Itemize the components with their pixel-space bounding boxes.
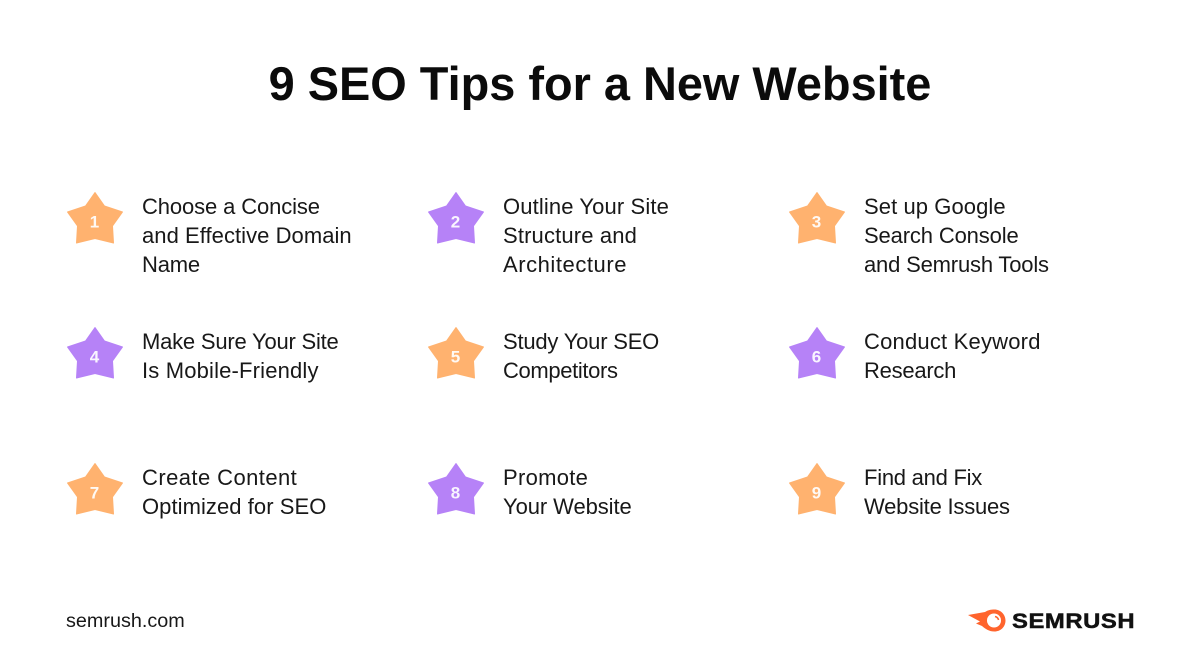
icon: orange star 7: 7	[90, 484, 99, 503]
tip 2	[428, 192, 669, 277]
text: tip 2: Structure and	[503, 223, 637, 248]
text: tip 9	[864, 465, 1010, 519]
text: tip 5: Study Your SEO	[503, 329, 659, 354]
tip 1	[67, 192, 352, 277]
text: tip 3: Set up Google	[864, 194, 1006, 219]
text: tip 7: Create Content	[142, 465, 297, 490]
tip 5	[428, 327, 659, 383]
text: tip 1	[142, 194, 352, 277]
icon: orange star 5	[428, 327, 484, 378]
tip 7	[67, 463, 326, 519]
text: tip 9: Website Issues	[864, 494, 1010, 519]
tip 8	[428, 463, 632, 519]
text: tip 7	[142, 465, 326, 519]
text: tip 4	[142, 329, 339, 383]
icon: purple star 2: 2	[451, 213, 460, 232]
text: tip 3: Search Console	[864, 223, 1019, 248]
text: tip 8	[503, 465, 632, 519]
text: tip 1: Name	[142, 252, 200, 277]
icon: fireball	[968, 610, 1006, 632]
icon: orange star 3: 3	[812, 213, 821, 232]
tip 3	[789, 192, 1049, 277]
icon: orange star 9	[789, 463, 845, 514]
footer: semrush.com: semrush.com	[66, 610, 185, 632]
text: tip 9: Find and Fix	[864, 465, 982, 490]
text: tip 4: Make Sure Your Site	[142, 329, 339, 354]
text: tip 6: Conduct Keyword	[864, 329, 1041, 354]
text: tip 2: Architecture	[503, 252, 627, 277]
text: tip 4: Is Mobile-Friendly	[142, 358, 319, 383]
icon: orange star 9: 9	[812, 484, 821, 503]
icon: purple star 4	[67, 327, 123, 378]
icon: orange star 1: 1	[90, 213, 99, 232]
text: tip 7: Optimized for SEO	[142, 494, 326, 519]
text: wordmark: SEMRUSH	[1012, 610, 1135, 633]
icon: purple star 4: 4	[90, 348, 100, 367]
text: tip 3	[864, 194, 1049, 277]
icon: orange star 1	[67, 192, 123, 244]
icon: orange star 3	[789, 192, 845, 244]
icon: orange star 5: 5	[451, 348, 460, 367]
tip 4	[67, 327, 339, 383]
icon: purple star 8: 8	[451, 484, 460, 503]
icon: purple star 2	[428, 192, 484, 244]
text: tip 2	[503, 194, 669, 277]
title: 9 SEO Tips for a New Website	[269, 58, 931, 110]
text: tip 6: Research	[864, 358, 956, 383]
text: tip 3: and Semrush Tools	[864, 252, 1049, 277]
tip 6	[789, 327, 1041, 383]
text: tip 5	[503, 329, 659, 383]
text: tip 1: Choose a Concise	[142, 194, 320, 219]
icon: purple star 6: 6	[812, 348, 821, 367]
icon: purple star 8	[428, 463, 484, 514]
icon: purple star 6	[789, 327, 845, 378]
text: tip 2: Outline Your Site	[503, 194, 669, 219]
logo: Semrush	[968, 610, 1135, 633]
icon: orange star 7	[67, 463, 123, 514]
text: tip 1: and Effective Domain	[142, 223, 352, 248]
tip 9	[789, 463, 1010, 519]
text: tip 6	[864, 329, 1041, 383]
text: tip 8: Your Website	[503, 494, 632, 519]
text: tip 5: Competitors	[503, 358, 618, 383]
text: tip 8: Promote	[503, 465, 588, 490]
